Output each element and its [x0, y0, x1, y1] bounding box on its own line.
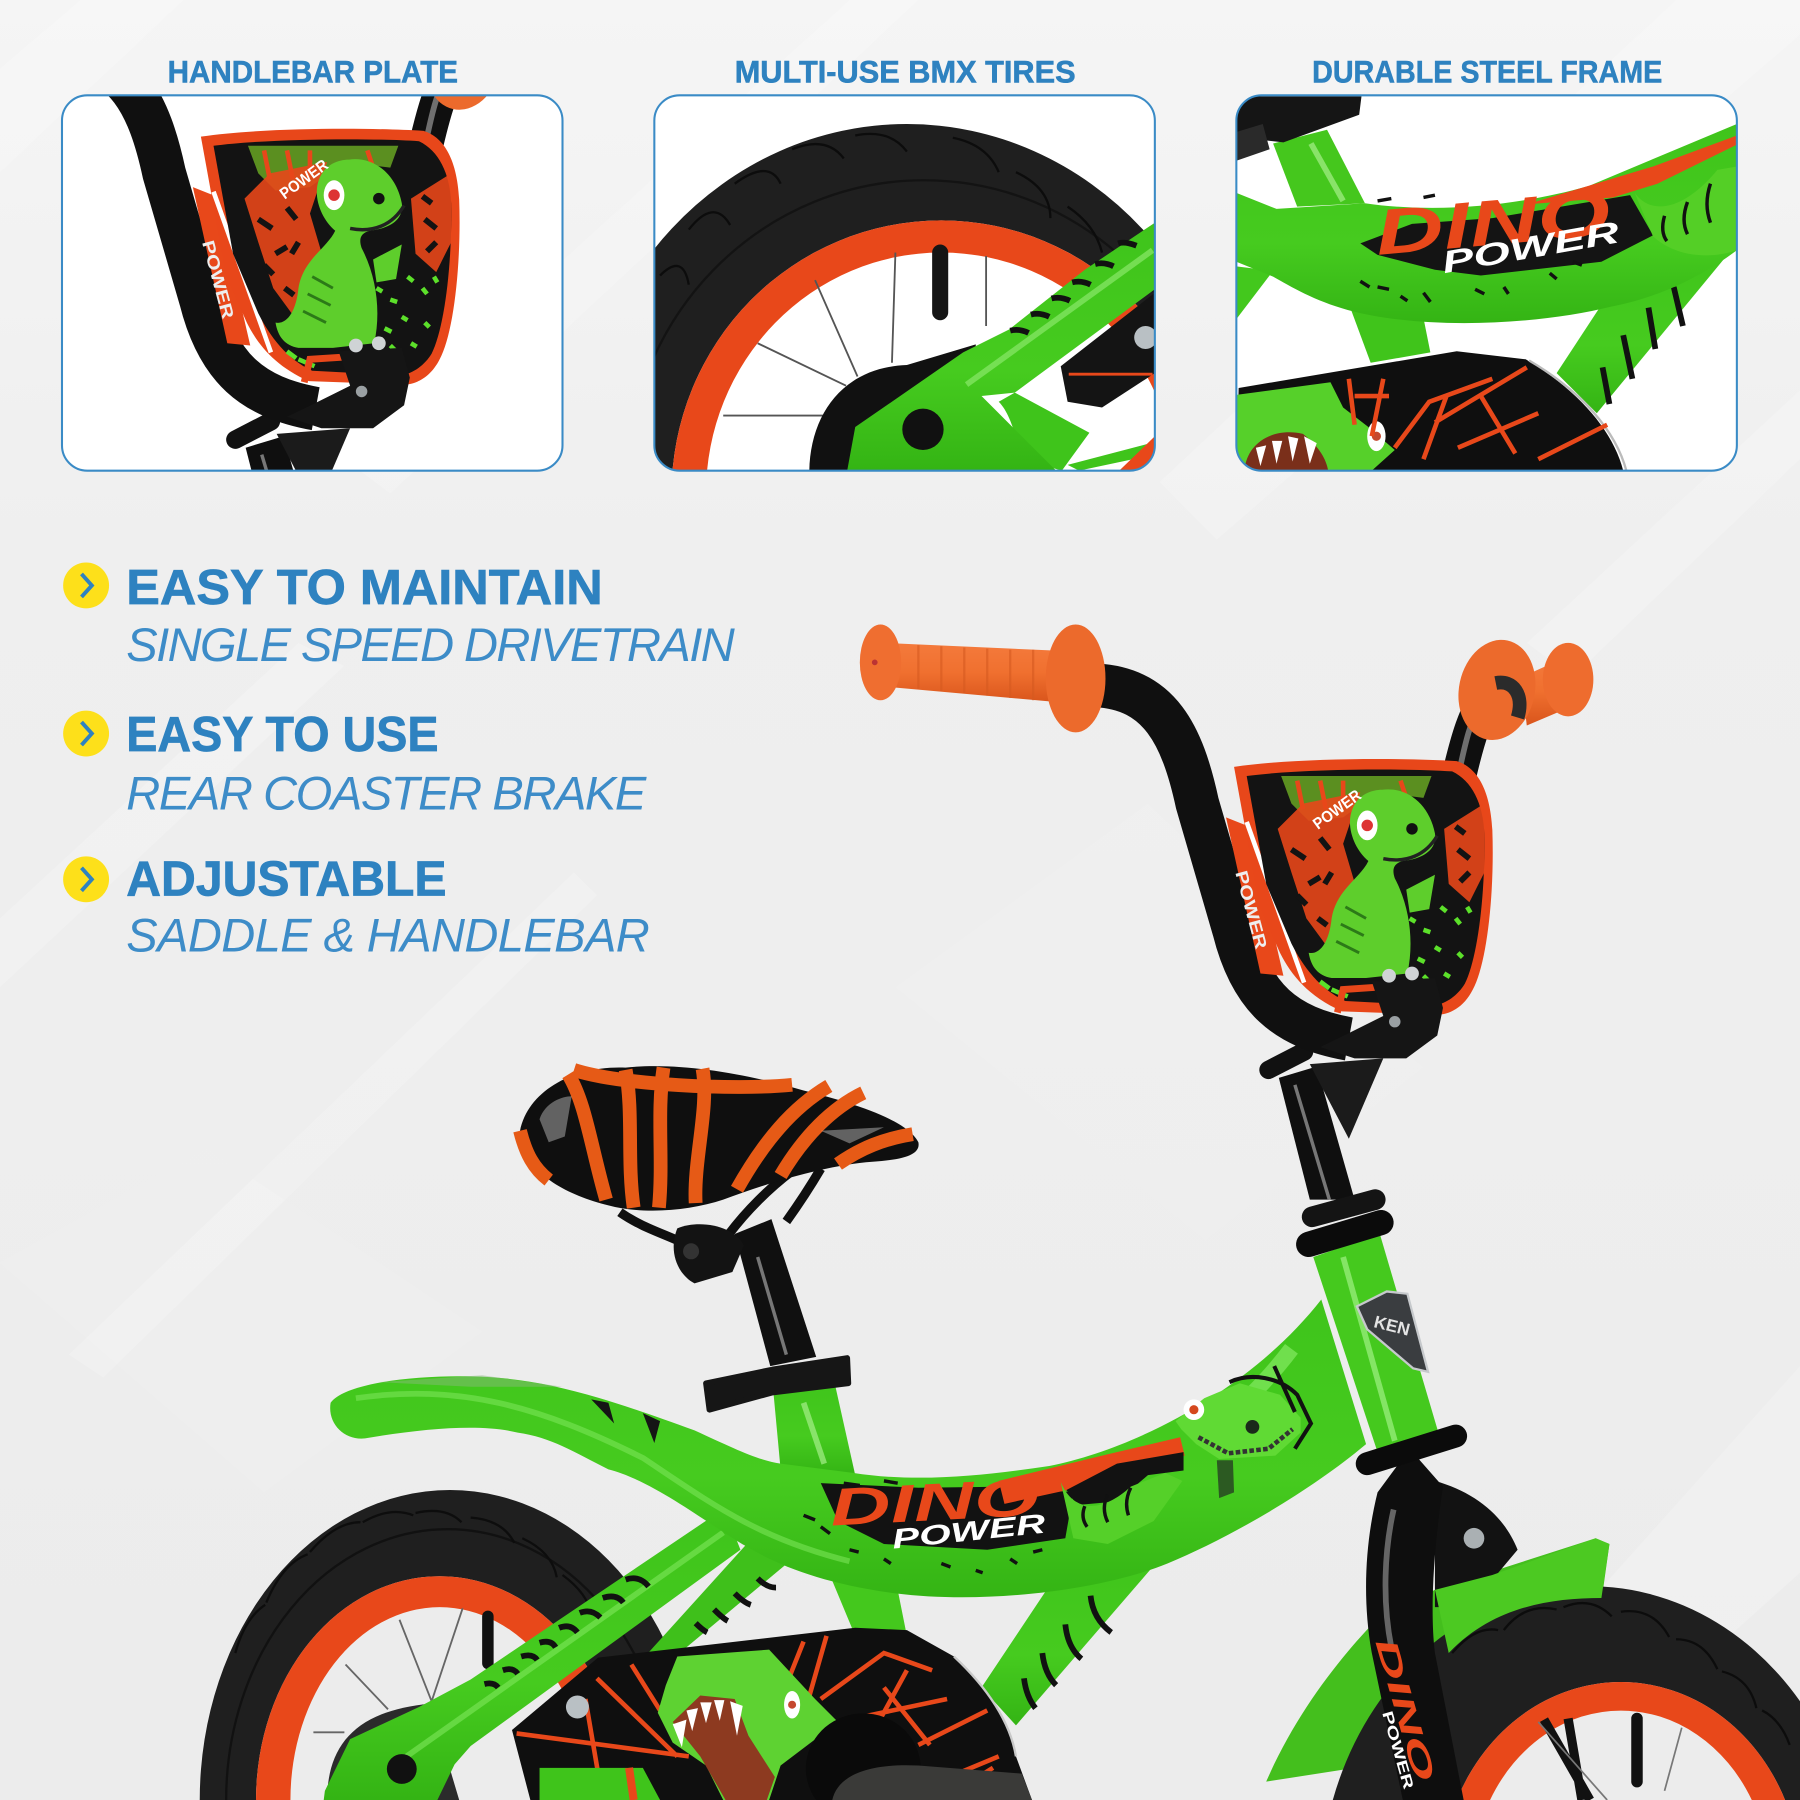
bullet icon 2 — [63, 711, 109, 757]
feature list — [63, 561, 735, 962]
handlebar plate: POWER — [1310, 786, 1365, 833]
photo crop: frame decal: POWER — [1439, 214, 1623, 280]
front fork: DINO — [1369, 1634, 1441, 1785]
badge: KEN — [1372, 1312, 1412, 1340]
feature 1 heading: EASY TO MAINTAIN — [126, 561, 603, 615]
bullet icon 1 — [63, 562, 109, 608]
head tube — [1313, 1234, 1438, 1452]
bike illustration — [200, 624, 1800, 1800]
saddle — [520, 1066, 919, 1211]
right bar and grip — [1449, 633, 1593, 781]
frame decal: Dino Power: POWER — [890, 1508, 1047, 1555]
frame decal: Dino Power — [804, 1366, 1311, 1573]
bar decal: POWER — [1231, 868, 1272, 952]
plate dinosaur — [1309, 789, 1437, 978]
photo crop: frame decal — [1236, 96, 1737, 472]
handlebar plate — [1234, 759, 1493, 1015]
panel: handlebar plate — [60, 60, 564, 472]
chainguard — [512, 1628, 1032, 1800]
fender and front wheel — [1266, 1481, 1800, 1800]
saddle post and clamp — [620, 1169, 848, 1410]
front fork — [1366, 1436, 1464, 1800]
rear wheel — [200, 1490, 700, 1800]
down tube — [982, 1550, 1167, 1725]
rear lower stay — [643, 1538, 804, 1665]
left bar — [1096, 685, 1349, 1039]
panel: durable steel frame — [1236, 54, 1737, 472]
feature 3 heading: ADJUSTABLE — [126, 852, 447, 906]
heading: BMX tires: MULTI-USE BMX TIRES — [735, 54, 1076, 90]
heading: steel frame: DURABLE STEEL FRAME — [1312, 54, 1662, 90]
frame dino head — [1176, 1366, 1311, 1498]
feature 1 detail: SINGLE SPEED DRIVETRAIN — [126, 618, 735, 671]
handlebar assembly — [860, 624, 1593, 1244]
bar decal — [1226, 817, 1283, 976]
photo crop: rear tire and frame stay — [655, 124, 1154, 470]
panel: multi-use BMX tires — [653, 60, 1156, 472]
seat tube lower — [827, 1567, 907, 1636]
frame decal: Dino Power: DINO — [829, 1468, 1040, 1538]
feature 3 detail: SADDLE & HANDLEBAR — [126, 909, 650, 962]
stem — [1268, 1052, 1383, 1244]
left grip — [860, 624, 1105, 732]
feature 2 detail: REAR COASTER BRAKE — [126, 766, 647, 819]
plate clamp hardware — [1320, 967, 1443, 1058]
heading: handlebar plate: HANDLEBAR PLATE — [168, 54, 458, 90]
feature 2 heading: EASY TO USE — [126, 708, 439, 762]
front fork: POWER — [1378, 1709, 1417, 1791]
main frame and rear fender tube — [330, 1299, 1366, 1597]
rear stay — [324, 1508, 740, 1800]
photo crop: frame decal: DINO — [1372, 177, 1613, 269]
badge — [1357, 1291, 1428, 1372]
bullet icon 3 — [63, 856, 109, 902]
photo crop: handlebar plate — [108, 96, 486, 470]
